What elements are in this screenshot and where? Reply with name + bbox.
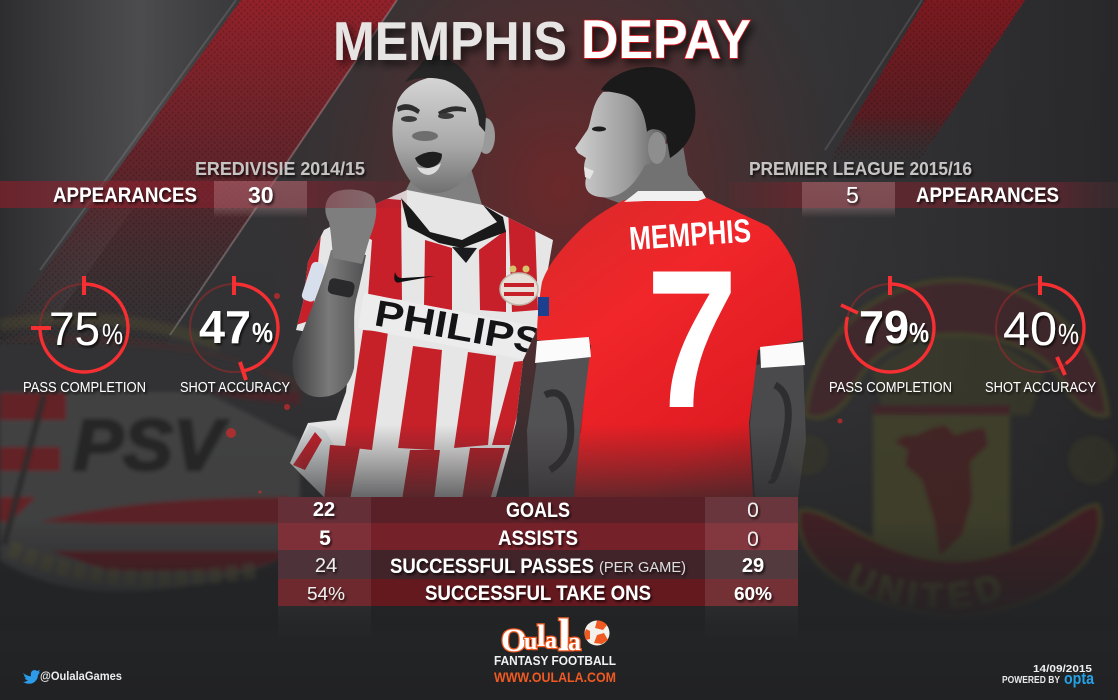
- left appearances bar: APPEARANCES: [53, 184, 197, 207]
- bottom fade: [0, 520, 1118, 630]
- row: assists: 5: [319, 527, 331, 550]
- faded PSV crest: [0, 318, 300, 592]
- logo: Oulala: O: [501, 623, 527, 659]
- MU arms: [527, 355, 806, 497]
- row: successful take ons: [307, 582, 772, 605]
- icon: twitter bird: [23, 670, 40, 684]
- row: goals: [313, 499, 759, 522]
- credit: date and opta: 14/09/2015: [1033, 663, 1092, 675]
- row: successful passes: 24: [315, 555, 337, 577]
- faded Manchester United crest: UNITED: [849, 563, 1000, 604]
- players: [280, 55, 810, 510]
- PSV head: [392, 55, 495, 193]
- sponsor band: [358, 293, 538, 360]
- shirt name: MEMPHIS: [628, 212, 752, 257]
- left diagonal red band: [0, 0, 397, 345]
- PSV neck: [406, 170, 482, 205]
- UEFA patch: [538, 297, 549, 316]
- credit: date and opta: opta: [1064, 669, 1094, 688]
- credit: date and opta: [1002, 663, 1094, 688]
- sponsor: PHILIPS: PHILIPS: [372, 293, 546, 362]
- title: [333, 8, 751, 72]
- MU head and neck: [575, 67, 702, 204]
- logo: Oulala: WWW.OULALA.COM: [494, 670, 616, 685]
- row: successful take ons: 60%: [734, 584, 772, 604]
- MU right cuff: [760, 342, 805, 368]
- title: DEPAY: [581, 8, 751, 70]
- gauge: 40% shot accuracy: %: [1058, 319, 1079, 351]
- logo: Oulala: l: [537, 618, 546, 653]
- row: successful take ons: 54%: [307, 584, 345, 604]
- player: PSV Memphis: [290, 56, 553, 497]
- logo: Oulala: l: [558, 609, 571, 660]
- faded PSV crest: PSV: [73, 406, 229, 486]
- gauge: 47% shot accuracy: %: [252, 317, 273, 348]
- shirt number: 7: [646, 229, 738, 449]
- swoosh: [394, 272, 435, 283]
- gauge: 79% pass completion: PASS COMPLETION: [829, 379, 952, 396]
- left appearances bar: [0, 181, 407, 218]
- gauge: 40% shot accuracy: [985, 276, 1096, 396]
- player: Man Utd Memphis: [527, 67, 810, 500]
- row: successful passes: (PER GAME): [599, 559, 686, 576]
- right appearances bar: [729, 182, 1118, 218]
- twitter handle: @OulalaGames: [40, 669, 122, 683]
- PSV jersey: [290, 190, 553, 497]
- logo: Oulala: [494, 609, 616, 685]
- stars: [510, 266, 530, 272]
- gauge: 75% pass completion: [23, 276, 146, 396]
- gauge: 75% pass completion: 75: [49, 302, 100, 355]
- right diagonal red band: [825, 0, 1025, 160]
- row: successful passes: 29: [742, 555, 764, 577]
- gauge: 47% shot accuracy: 47: [199, 301, 251, 353]
- MU shirt: [537, 197, 803, 497]
- sleeve patch: [302, 262, 325, 302]
- right appearances bar: 5: [846, 182, 859, 208]
- stats table: [278, 497, 798, 642]
- row: assists: [319, 527, 759, 551]
- icon: football: [584, 620, 610, 646]
- gauge: 40% shot accuracy: 40: [1003, 302, 1057, 355]
- stats row backgrounds: [278, 497, 798, 642]
- logo: Oulala: u: [524, 629, 537, 655]
- gauge: 75% pass completion: %: [102, 319, 123, 351]
- gauge: 40% shot accuracy: SHOT ACCURACY: [985, 379, 1096, 396]
- right appearances bar: APPEARANCES: [916, 184, 1059, 207]
- row: successful passes: [315, 555, 764, 578]
- row: goals: 0: [747, 499, 759, 522]
- right league header: PREMIER LEAGUE 2015/16: [749, 159, 972, 179]
- collar: [401, 198, 506, 248]
- row: assists: ASSISTS: [498, 527, 578, 550]
- logo: Oulala: FANTASY FOOTBALL: [494, 653, 616, 668]
- red glow particles: [226, 293, 842, 494]
- row: successful passes: SUCCESSFUL PASSES: [390, 555, 594, 578]
- credit: date and opta: POWERED BY: [1002, 675, 1060, 686]
- MU left cuff: [535, 337, 591, 363]
- left league header: EREDIVISIE 2014/15: [195, 159, 365, 179]
- logo: Oulala: a: [545, 628, 557, 654]
- row: successful take ons: SUCCESSFUL TAKE ONS: [425, 582, 651, 605]
- gauge: 79% pass completion: [829, 276, 952, 396]
- MU collar: [624, 191, 706, 202]
- gauge: 47% shot accuracy: SHOT ACCURACY: [180, 379, 290, 396]
- faded Manchester United crest: [798, 278, 1113, 604]
- gauge: 47% shot accuracy: [180, 276, 290, 396]
- badge: [500, 273, 538, 305]
- title: MEMPHIS: [333, 10, 567, 72]
- row: goals: GOALS: [506, 499, 570, 522]
- left appearances bar: 30: [248, 182, 274, 208]
- gauge: 79% pass completion: 79: [859, 301, 909, 353]
- row: assists: 0: [747, 528, 759, 551]
- PSV arm and fist: [292, 190, 376, 397]
- row: goals: 22: [313, 499, 335, 521]
- gauge: 75% pass completion: PASS COMPLETION: [23, 379, 146, 396]
- gauge: 79% pass completion: %: [909, 317, 929, 348]
- logo: Oulala: a: [568, 627, 581, 656]
